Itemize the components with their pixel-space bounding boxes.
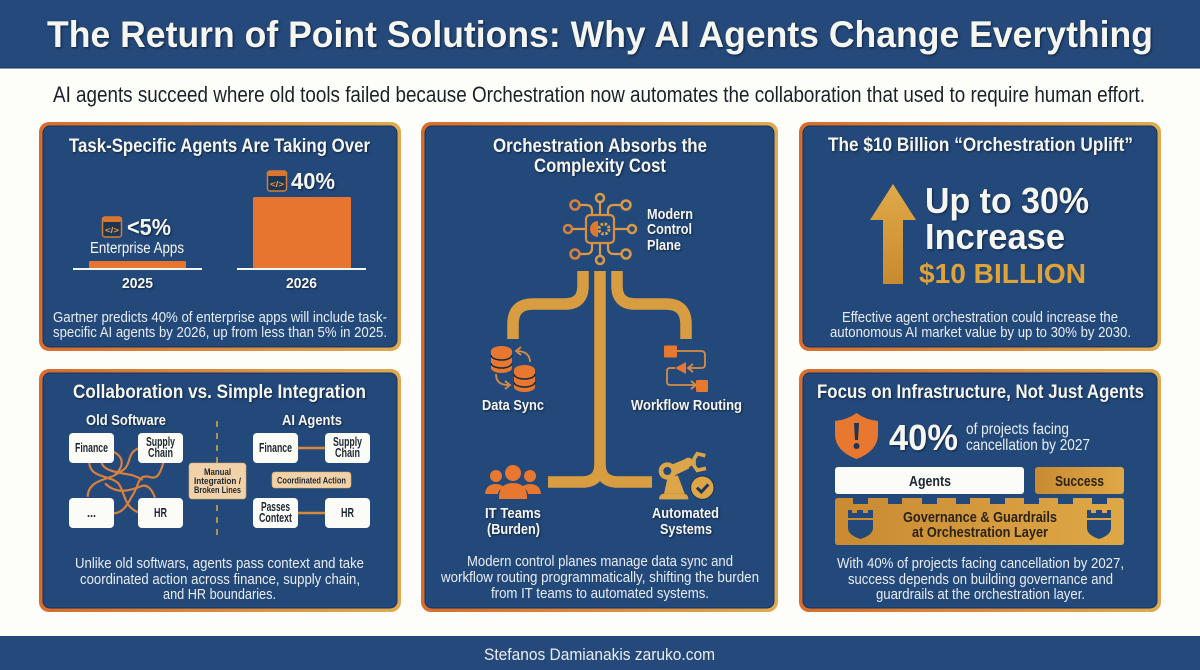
description: autonomous AI market value by up to 30% by 2030. <box>830 324 1131 341</box>
icon: app 2025: </> <box>105 226 119 235</box>
callout: manual integration: Integration / <box>194 476 241 487</box>
bar: agents <box>835 467 1024 494</box>
description: success depends on building governance and <box>848 571 1113 588</box>
heading: Collaboration vs. Simple Integration <box>73 381 366 403</box>
year 2025: 2025 <box>122 275 153 292</box>
stat caption <box>966 421 1090 454</box>
wall label: at Orchestration Layer <box>912 524 1048 541</box>
icon: app 2026: </> <box>270 180 284 189</box>
wall label: Governance & Guardrails <box>903 509 1057 526</box>
panel: orchestration uplift <box>799 122 1161 351</box>
old software boxes: ... <box>87 506 96 520</box>
wall label <box>903 509 1057 541</box>
icon: robot arm <box>659 454 714 499</box>
stat caption: cancellation by 2027 <box>966 437 1090 454</box>
footer: Stefanos Damianakis zaruko.com <box>484 645 715 664</box>
footer <box>0 636 1200 670</box>
label it teams: IT Teams <box>485 505 541 522</box>
icon: workflow routing <box>664 346 708 392</box>
callout: coordinated action <box>272 472 351 488</box>
stat caption: of projects facing <box>966 421 1069 438</box>
label it teams: (Burden) <box>487 521 540 538</box>
panel: collaboration vs integration <box>39 369 401 612</box>
bar: success <box>1035 467 1124 494</box>
icon: app 2026 <box>268 171 286 191</box>
value 2025: <5% <box>127 214 171 240</box>
value 2026: 40% <box>291 168 335 194</box>
icon: people <box>485 465 541 499</box>
description: workflow routing programmatically, shifting the burden <box>440 569 759 586</box>
description: specific AI agents by 2026, up from less than 5% in 2025. <box>53 324 387 341</box>
title: The Return of Point Solutions: Why AI Agents Change Everything <box>47 14 1153 55</box>
ai agents boxes: Passes <box>261 500 290 514</box>
label ai agents: AI Agents <box>282 412 342 429</box>
ai agents boxes: Supply <box>333 435 362 449</box>
panel: orchestration <box>421 122 778 612</box>
description: coordinated action across finance, supply chain, <box>80 571 360 588</box>
description: With 40% of projects facing cancellation by 2027, <box>837 555 1124 572</box>
label modern control plane: Control <box>647 221 692 238</box>
icon: left tower shield <box>848 510 873 539</box>
tangled connections <box>88 448 163 513</box>
heading: The $10 Billion “Orchestration Uplift” <box>828 134 1133 156</box>
old software boxes <box>69 433 183 528</box>
heading: Complexity Cost <box>534 155 666 177</box>
callout: manual integration: Manual <box>204 467 231 478</box>
heading: Focus on Infrastructure, Not Just Agents <box>817 381 1144 403</box>
panel: infrastructure <box>799 369 1161 612</box>
connector pipes <box>513 271 686 482</box>
description <box>440 553 759 602</box>
callout: manual integration <box>189 463 246 499</box>
label workflow routing: Workflow Routing <box>631 397 742 414</box>
ai agents boxes: Chain <box>335 446 360 460</box>
icon: control plane chip <box>564 194 636 264</box>
header banner <box>0 0 1200 68</box>
label it teams <box>485 505 541 538</box>
description: Modern control planes manage data sync and <box>467 553 733 570</box>
description: from IT teams to automated systems. <box>491 585 709 602</box>
big stat: Up to 30% <box>925 180 1089 221</box>
callout: coordinated action: Coordinated Action <box>277 476 346 486</box>
label old software: Old Software <box>86 412 166 429</box>
callout: manual integration: Broken Lines <box>194 485 241 496</box>
bar 2025 <box>89 261 186 269</box>
bar: success: Success <box>1055 473 1104 490</box>
old software boxes: HR <box>154 506 167 520</box>
old software boxes: Supply <box>146 435 175 449</box>
heading: Task-Specific Agents Are Taking Over <box>69 135 370 157</box>
bar: agents: Agents <box>909 473 951 490</box>
label enterprise apps: Enterprise Apps <box>90 240 184 257</box>
heading <box>493 135 707 177</box>
icon: app 2025 <box>102 217 122 237</box>
big stat <box>919 180 1089 289</box>
label automated systems: Automated <box>652 505 719 522</box>
label modern control plane: Modern <box>647 206 693 223</box>
description: Gartner predicts 40% of enterprise apps will include task- <box>53 309 387 326</box>
ai agents boxes: HR <box>341 506 354 520</box>
label data sync: Data Sync <box>482 397 544 414</box>
year 2026: 2026 <box>286 275 317 292</box>
bar 2026 <box>253 197 351 269</box>
ai agents boxes <box>253 433 370 528</box>
description <box>75 555 364 603</box>
description <box>53 309 387 341</box>
old software boxes: Chain <box>148 446 173 460</box>
label automated systems <box>652 505 719 538</box>
icon: data sync <box>491 346 535 392</box>
description <box>830 309 1131 341</box>
stat 40%: 40% <box>889 417 958 458</box>
icon: warning shield <box>835 413 878 459</box>
panel: task-specific agents <box>39 122 401 351</box>
description: guardrails at the orchestration layer. <box>876 586 1085 603</box>
big stat: Increase <box>925 216 1065 257</box>
description: Effective agent orchestration could increase the <box>842 309 1118 326</box>
foundation wall <box>835 498 1124 545</box>
icon: up arrow <box>870 184 916 284</box>
description <box>837 555 1124 603</box>
heading: Orchestration Absorbs the <box>493 135 707 157</box>
big stat: $10 BILLION <box>919 258 1086 289</box>
old software boxes: Finance <box>75 441 108 455</box>
bar chart <box>73 168 366 292</box>
description: Unlike old softwars, agents pass context and take <box>75 555 364 572</box>
label modern control plane: Plane <box>647 237 681 254</box>
ai agents boxes: Finance <box>259 441 292 455</box>
label automated systems: Systems <box>660 521 712 538</box>
icon: right tower shield <box>1087 510 1111 539</box>
ai agents boxes: Context <box>259 511 293 525</box>
description: and HR boundaries. <box>163 586 276 603</box>
divider <box>216 421 218 540</box>
label modern control plane <box>647 206 693 254</box>
